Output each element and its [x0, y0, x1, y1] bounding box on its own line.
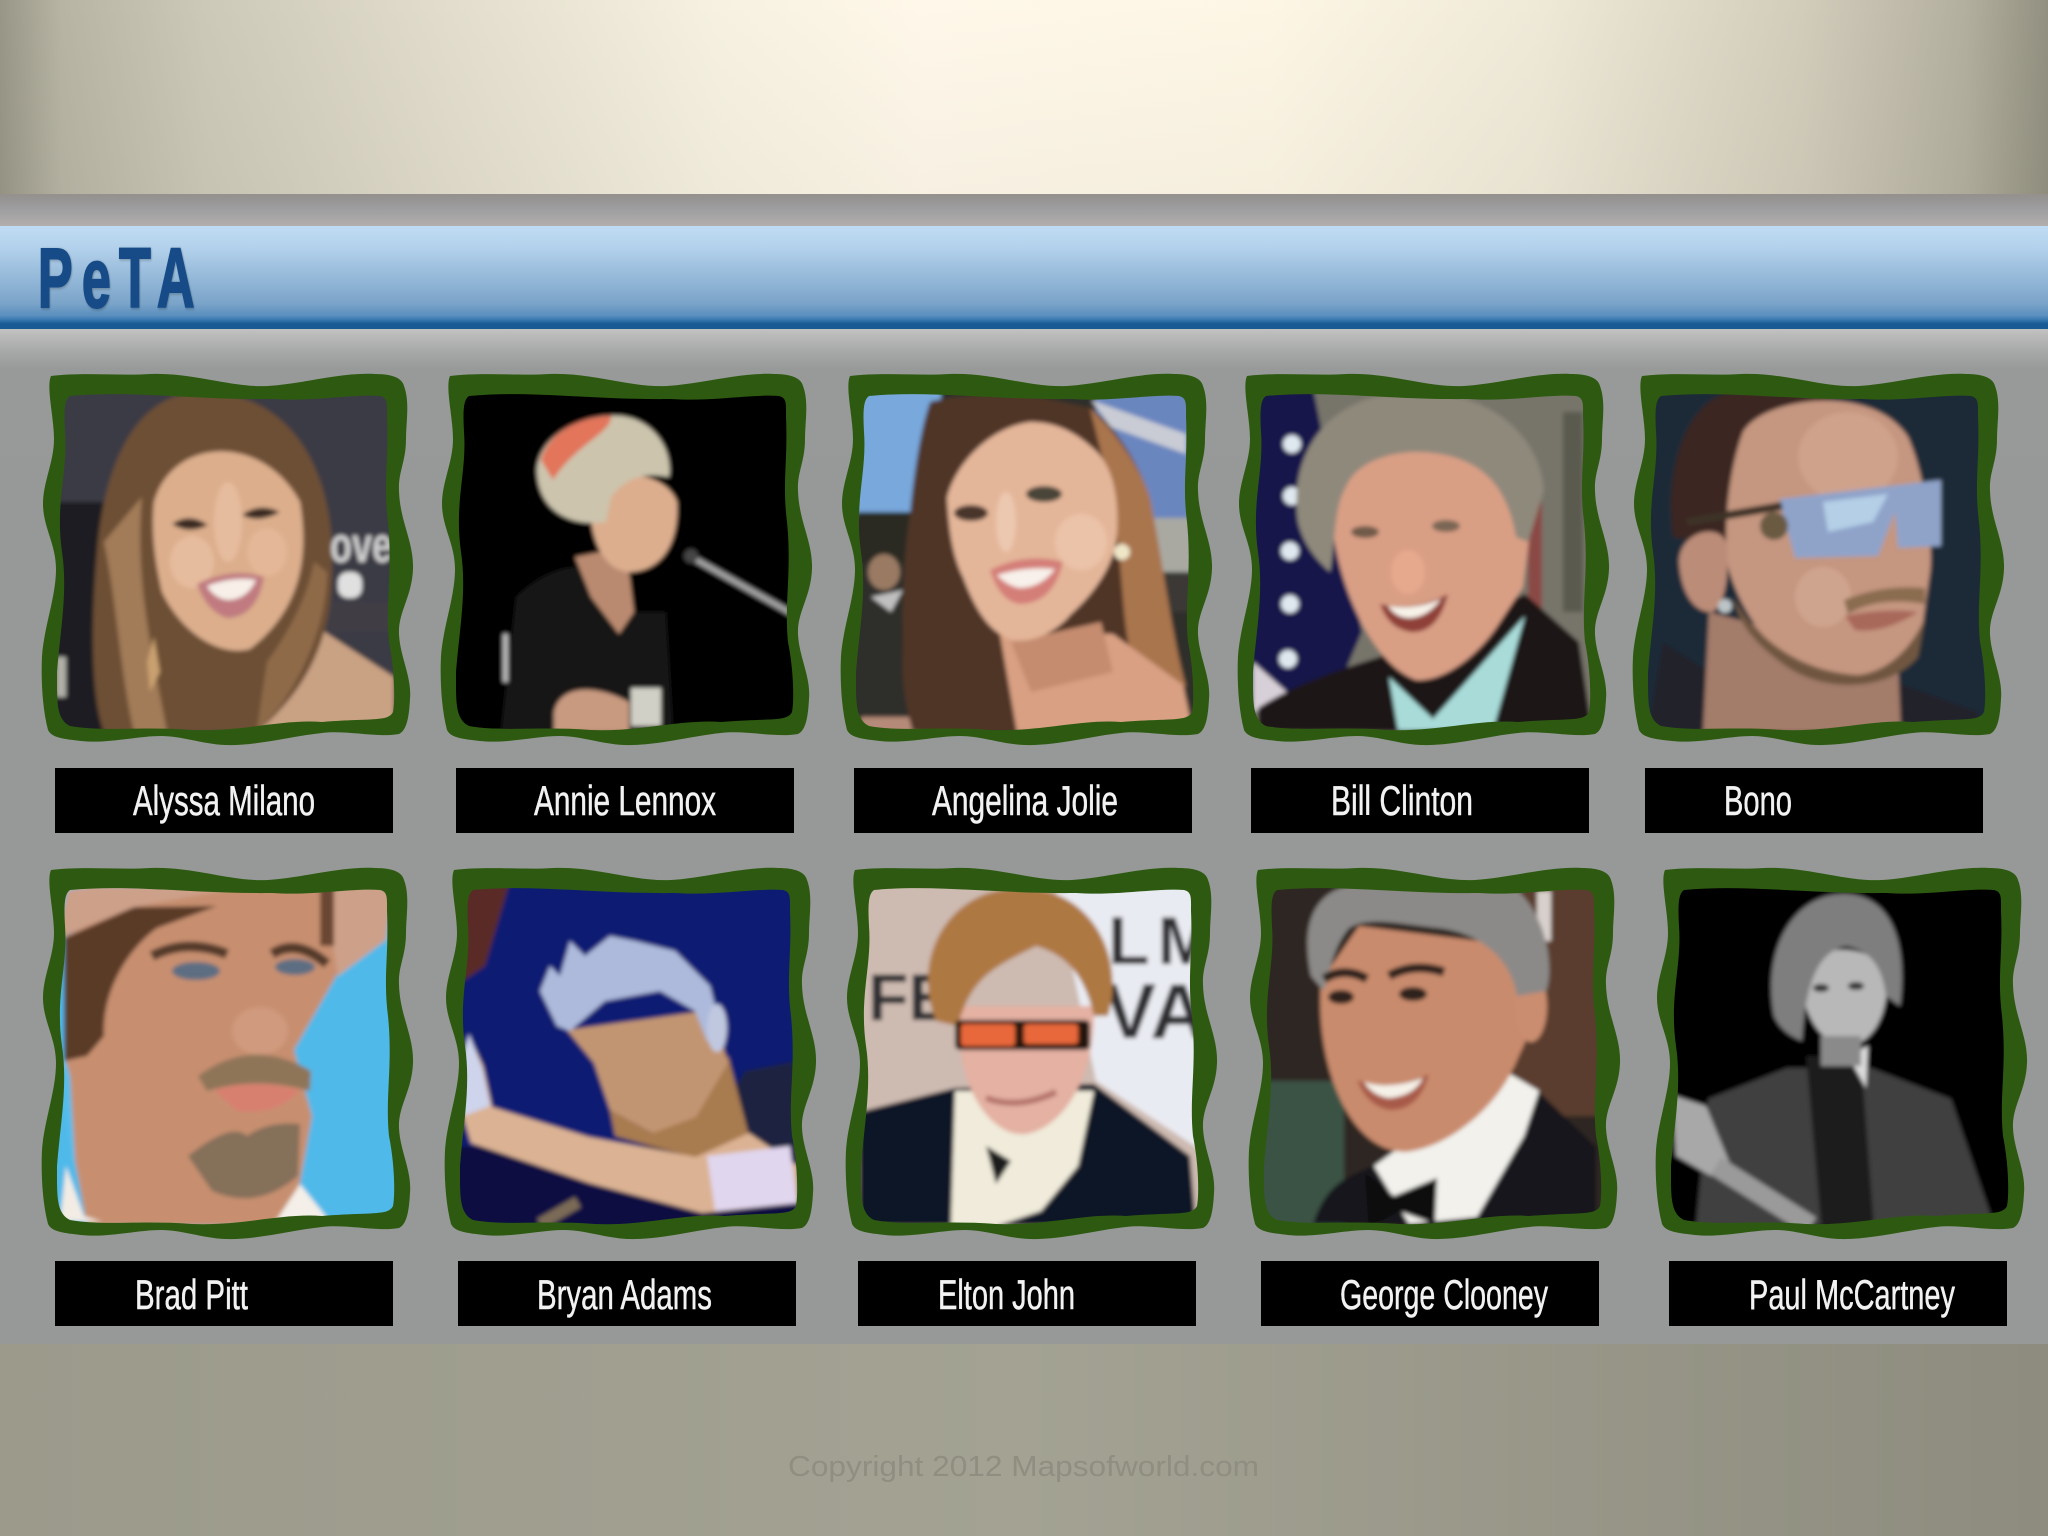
panel: Annie Lennox — [441, 372, 812, 745]
portrait: Elton John: FE — [868, 960, 952, 1034]
panel: Elton John — [846, 866, 1222, 1239]
label: Alyssa Milano — [55, 768, 393, 833]
panel: Bryan Adams — [445, 866, 816, 1239]
label: Angelina Jolie: Angelina Jolie — [932, 777, 1118, 824]
portrait: Bono — [1648, 394, 1986, 730]
panel: Alyssa Milano — [42, 372, 413, 745]
band lower shading — [0, 329, 2048, 509]
header bar — [0, 226, 2048, 329]
panel: Angelina Jolie — [841, 372, 1212, 745]
label: Brad Pitt: Brad Pitt — [135, 1271, 248, 1318]
panel: Bill Clinton — [1238, 372, 1609, 745]
band top shading — [0, 194, 2048, 226]
label: Elton John — [858, 1261, 1196, 1326]
label: Angelina Jolie — [854, 768, 1192, 833]
panel: Paul McCartney — [1656, 866, 2027, 1239]
portrait: Bryan Adams — [460, 888, 798, 1224]
label: Bill Clinton — [1251, 768, 1589, 833]
label: Brad Pitt — [55, 1261, 393, 1326]
portrait: Paul McCartney — [1671, 888, 2008, 1224]
panel: George Clooney — [1249, 866, 1620, 1239]
label: Bill Clinton: Bill Clinton — [1331, 777, 1473, 824]
portrait: Alyssa Milano — [57, 394, 394, 730]
label: Bono: Bono — [1724, 777, 1792, 824]
label: Bono — [1645, 768, 1983, 833]
panel: Bono — [1633, 372, 2004, 745]
portrait: Elton John — [861, 888, 1198, 1224]
copyright: Copyright 2012 Mapsofworld.com — [788, 1451, 1259, 1483]
label: Annie Lennox: Annie Lennox — [534, 777, 716, 824]
label: George Clooney: George Clooney — [1340, 1271, 1548, 1318]
label: Alyssa Milano: Alyssa Milano — [133, 777, 315, 824]
label: Paul McCartney — [1669, 1261, 2007, 1326]
portrait: Elton John: VA — [1104, 967, 1207, 1055]
portrait: Elton John: LM — [1108, 903, 1222, 979]
portrait: Brad Pitt — [56, 888, 394, 1224]
portrait: Angelina Jolie — [856, 394, 1194, 730]
top background — [0, 0, 2048, 194]
title: PeTA — [38, 231, 194, 325]
portrait: Annie Lennox — [456, 394, 794, 730]
label: Bryan Adams — [458, 1261, 796, 1326]
label: Paul McCartney: Paul McCartney — [1749, 1271, 1955, 1318]
portrait: Alyssa Milano: ove — [330, 517, 392, 573]
label: Bryan Adams: Bryan Adams — [537, 1271, 712, 1318]
portrait: Bill Clinton — [1253, 394, 1590, 730]
grey content band — [0, 194, 2048, 1344]
label: Annie Lennox — [456, 768, 794, 833]
label: Elton John: Elton John — [938, 1271, 1075, 1318]
label: George Clooney — [1261, 1261, 1599, 1326]
panel: Brad Pitt — [42, 866, 413, 1239]
top background shading — [0, 0, 2048, 194]
bottom background — [0, 1344, 2048, 1536]
portrait: George Clooney — [1264, 888, 1602, 1224]
